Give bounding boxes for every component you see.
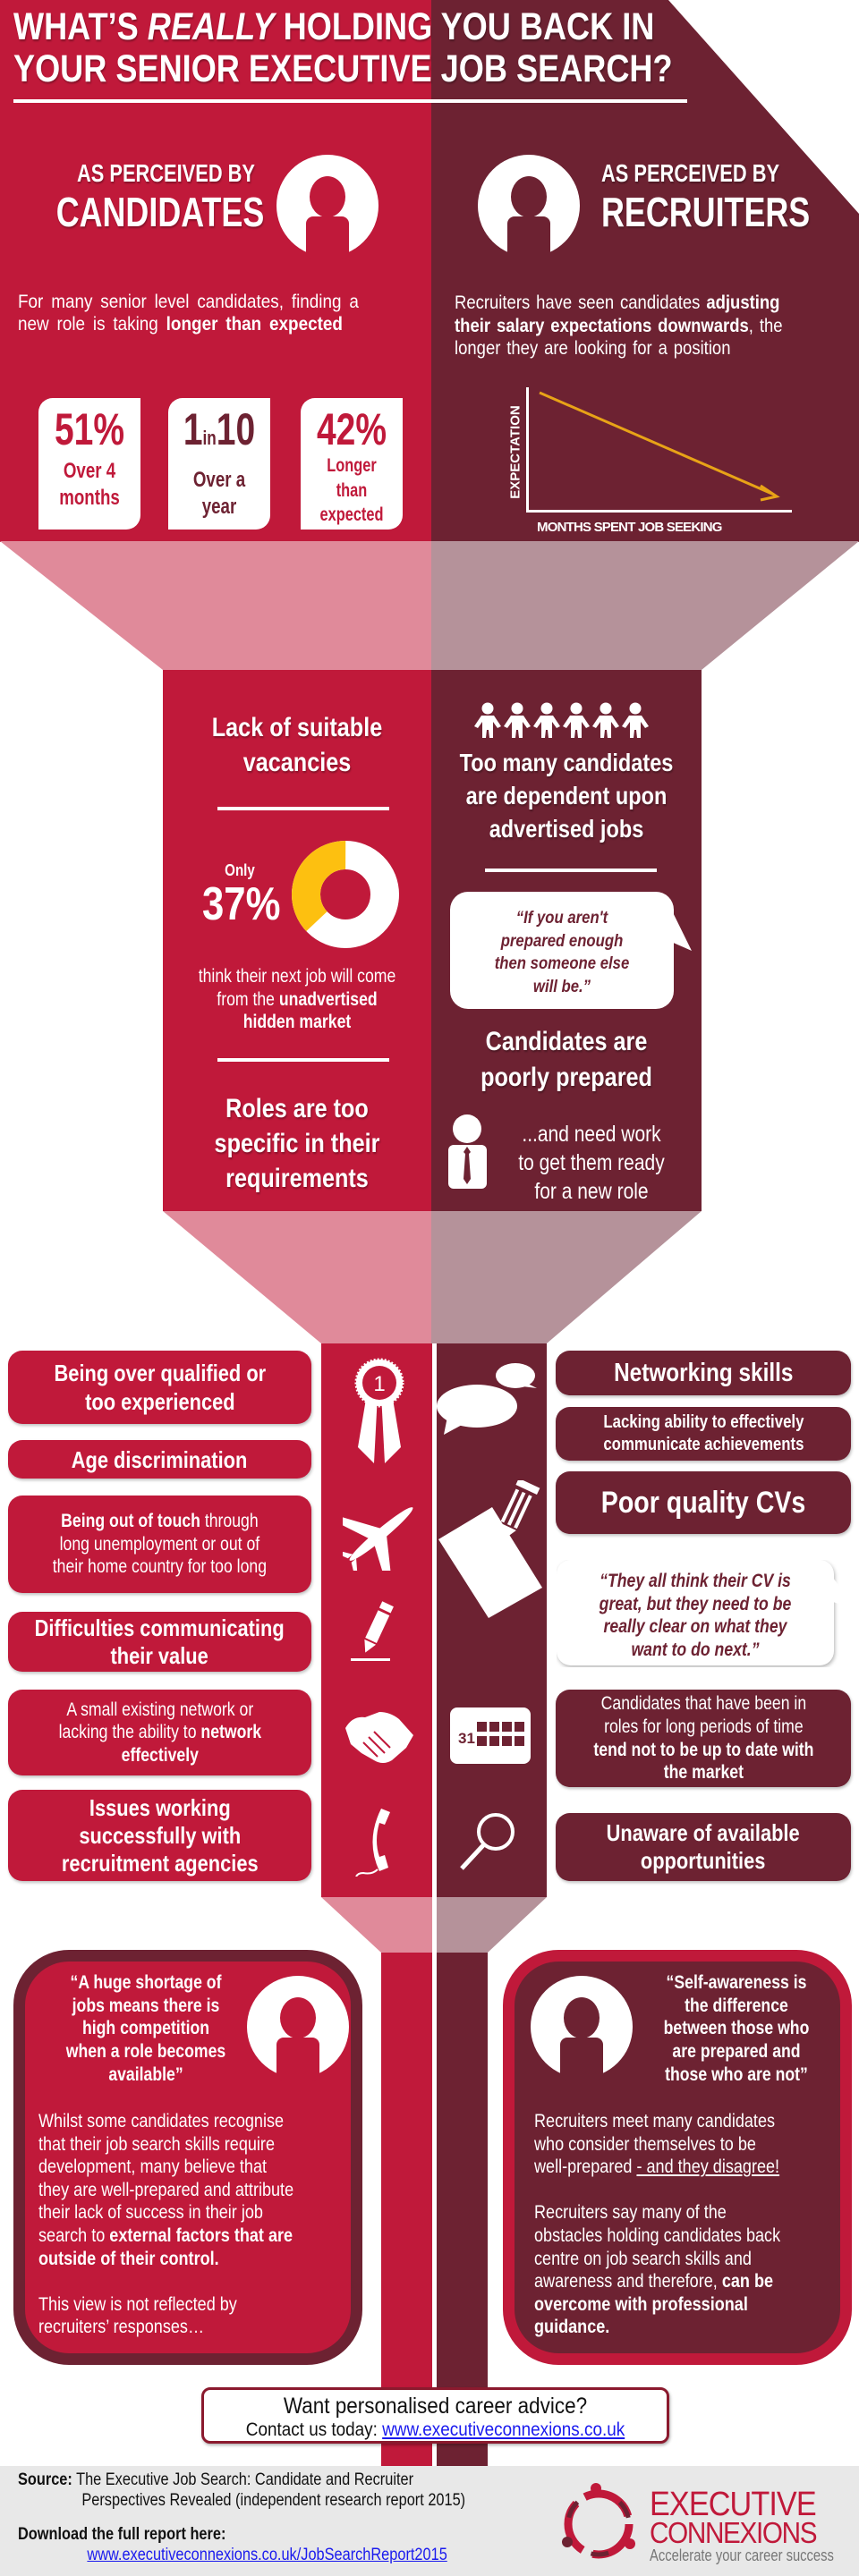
box: over qualified: too experienced: [85, 1388, 234, 1415]
icon: magnifier: [460, 1813, 515, 1870]
title: [13, 5, 673, 90]
heading: roles too specific: [215, 1094, 381, 1195]
text: candidates intro: [18, 292, 359, 335]
callout: career advice: [201, 2387, 669, 2444]
stat: 42%: 42%: [317, 404, 387, 454]
box: out of touch: their home country for too long: [53, 1556, 267, 1577]
callout: CV quote: [557, 1560, 838, 1667]
callout: CV quote: really clear on what they: [604, 1616, 787, 1637]
footer: download: Download the full report here:: [18, 2525, 225, 2544]
quote: [66, 1972, 225, 2085]
box: communicating value: Difficulties communicating: [35, 1614, 285, 1640]
text body: who consider themselves to be: [534, 2134, 756, 2155]
box: small network: A small existing network or: [66, 1699, 253, 1720]
box: unaware: opportunities: [641, 1847, 766, 1874]
footer: source: Perspectives Revealed (independent research report 2015): [81, 2491, 465, 2510]
icon: document with pencil: [438, 1480, 542, 1618]
heading: recruiters: RECRUITERS: [601, 189, 810, 235]
footer: download: www.executiveconnexions.co.uk/JobSearchReport2015: [87, 2546, 447, 2564]
icon: calendar: 31: [458, 1730, 475, 1747]
box: over qualified: [8, 1351, 311, 1424]
text body: development, many believe that: [38, 2157, 267, 2177]
callout: CV quote: want to do next.”: [631, 1640, 760, 1660]
text: recruiters intro: Recruiters have seen candidates adjusting: [455, 292, 779, 313]
icon: award ribbon: 1: [373, 1372, 386, 1396]
icon: person: [531, 1976, 633, 2073]
icon: calendar: [450, 1707, 531, 1764]
text body: outside of their control.: [38, 2249, 219, 2269]
box: lacking ability: Lacking ability to effectively: [603, 1412, 804, 1432]
logo: [562, 2483, 834, 2564]
box: long periods: roles for long periods of time: [604, 1716, 803, 1737]
icon: candidate person: [276, 155, 378, 252]
quote: available”: [108, 2064, 183, 2085]
chart: expectation vs months: [508, 387, 792, 535]
logo: CONNEXIONS: [650, 2516, 816, 2549]
stat: 42%: [301, 398, 403, 530]
box: poor CVs: Poor quality CVs: [601, 1485, 805, 1519]
text body: This view is not reflected by: [38, 2294, 237, 2315]
donut chart: [292, 841, 399, 948]
callout: quote bubble: prepared enough: [501, 932, 623, 950]
text body: [534, 2111, 780, 2337]
text body: Recruiters say many of the: [534, 2202, 727, 2223]
icon: person: [247, 1976, 349, 2073]
text body: Whilst some candidates recognise: [38, 2111, 284, 2131]
box: out of touch: Being out of touch through: [61, 1511, 259, 1531]
icon: airplane: [343, 1507, 413, 1571]
box: lacking ability: communicate achievements: [603, 1435, 804, 1454]
stat: 1 in 10: [168, 398, 270, 530]
callout: quote bubble: will be.”: [533, 977, 591, 996]
quote: high competition: [82, 2018, 209, 2038]
icon: award ribbon: [354, 1358, 404, 1463]
box: unaware: Unaware of available: [607, 1819, 800, 1846]
heading: candidates: AS PERCEIVED BY: [77, 159, 255, 187]
heading: poorly prepared: poorly prepared: [481, 1063, 652, 1092]
text body: obstacles holding candidates back: [534, 2225, 780, 2246]
text body: their lack of success in their job: [38, 2202, 263, 2223]
text: recruiters intro: longer they are looking for a position: [455, 338, 730, 359]
box: recruitment agencies: successfully with: [79, 1821, 241, 1848]
stat: 1 in 10: 1in10: [183, 404, 255, 454]
callout: quote bubble: [450, 892, 692, 1009]
text: candidates intro: new role is taking longer than expected: [18, 313, 343, 335]
text body: guidance.: [534, 2317, 609, 2337]
stat: 51%: [38, 398, 140, 530]
heading: roles too specific: Roles are too: [225, 1094, 369, 1123]
heading: too many candidates: are dependent upon: [466, 782, 667, 809]
icon: telephone: [355, 1809, 390, 1877]
heading: lack of suitable vacancies: Lack of suitable: [212, 713, 382, 742]
text: recruiters intro: their salary expectations downwards, the: [455, 315, 783, 336]
heading: too many candidates: [460, 749, 674, 844]
stat: only 37%: 37%: [202, 878, 280, 930]
chart: expectation vs months: MONTHS SPENT JOB SEEKING: [537, 520, 722, 535]
footer: source: [18, 2470, 465, 2510]
stat: only 37%: Only: [225, 861, 255, 879]
footer: download: [18, 2525, 447, 2564]
text body: overcome with professional: [534, 2294, 748, 2315]
stat: 51%: Over 4: [64, 459, 115, 483]
callout: quote bubble: then someone else: [495, 954, 629, 973]
heading: poorly prepared: [481, 1027, 652, 1093]
stat: 1 in 10: Over a: [193, 468, 245, 492]
box: poor CVs: [556, 1471, 851, 1534]
quote: jobs means there is: [72, 1996, 219, 2016]
callout: CV quote: great, but they need to be: [600, 1594, 791, 1614]
quote: “A huge shortage of: [71, 1972, 221, 1993]
box: long periods: Candidates that have been in: [600, 1693, 806, 1714]
text: recruiters intro: [455, 292, 783, 359]
text body: centre on job search skills and: [534, 2249, 752, 2269]
stat: 1 in 10: year: [202, 495, 236, 519]
quote: “Self-awareness is: [667, 1972, 806, 1993]
box: out of touch: [8, 1496, 311, 1593]
box: networking skills: Networking skills: [614, 1358, 793, 1386]
quote: [664, 1972, 809, 2085]
box: out of touch: long unemployment or out of: [60, 1534, 259, 1555]
callout: CV quote: “They all think their CV is: [600, 1571, 791, 1591]
text body: Recruiters meet many candidates: [534, 2111, 775, 2131]
box: recruitment agencies: Issues working: [89, 1794, 230, 1821]
heading: recruiters: [601, 159, 810, 235]
box: long periods: tend not to be up to date with: [593, 1739, 813, 1760]
text: need work: ...and need work: [522, 1122, 661, 1147]
heading: lack of suitable vacancies: vacancies: [243, 748, 351, 777]
callout: quote bubble: “If you aren't: [516, 909, 608, 928]
box: age discrimination: Age discrimination: [72, 1445, 248, 1472]
heading: lack of suitable vacancies: [212, 713, 383, 777]
stat: 51%: 51%: [55, 404, 124, 454]
icon: recruiter person: [478, 155, 580, 252]
text: candidates intro: For many senior level candidates, finding a: [18, 292, 359, 312]
stat: 42%: than: [336, 479, 367, 501]
icon: person with tie: [448, 1114, 487, 1189]
heading: roles too specific: requirements: [225, 1164, 369, 1193]
box: long periods: [556, 1690, 851, 1787]
stat: 42%: expected: [319, 504, 384, 525]
chart: expectation vs months: EXPECTATION: [508, 405, 523, 499]
heading: candidates: [56, 159, 265, 235]
box: small network: effectively: [121, 1745, 199, 1766]
text: hidden market: [199, 966, 395, 1032]
text: hidden market: think their next job will come: [199, 966, 395, 987]
panel: candidates summary: [13, 1950, 362, 2365]
text body: [38, 2111, 293, 2337]
logo: EXECUTIVE: [650, 2486, 816, 2523]
footer: source: Source: The Executive Job Search: Candidate and Recruiter: [18, 2470, 413, 2489]
heading: roles too specific: specific in their: [215, 1129, 379, 1158]
text body: well-prepared - and they disagree!: [534, 2157, 779, 2177]
box: small network: lacking the ability to network: [58, 1722, 261, 1742]
icon: speech bubbles: [437, 1363, 537, 1435]
heading: candidates: CANDIDATES: [56, 189, 264, 235]
box: networking skills: [556, 1351, 851, 1395]
box: lacking ability: [556, 1407, 851, 1461]
stat: 51%: months: [59, 486, 120, 510]
box: over qualified: Being over qualified or: [54, 1360, 266, 1386]
text: need work: for a new role: [534, 1179, 649, 1204]
box: small network: [8, 1690, 311, 1775]
box: recruitment agencies: [8, 1790, 311, 1881]
quote: those who are not”: [665, 2064, 808, 2085]
icon: handshake: [345, 1712, 413, 1763]
stat: 42%: Longer: [327, 455, 377, 476]
quote: when a role becomes: [66, 2041, 225, 2062]
box: long periods: the market: [663, 1762, 744, 1783]
text body: search to external factors that are: [38, 2225, 293, 2246]
box: communicating value: [8, 1612, 311, 1672]
text: hidden market: from the unadvertised: [217, 989, 378, 1009]
heading: poorly prepared: Candidates are: [486, 1027, 647, 1056]
icon: pencil: [351, 1601, 394, 1661]
text body: that their job search skills require: [38, 2134, 275, 2155]
quote: the difference: [685, 1996, 788, 2016]
callout: career advice: Want personalised career advice?: [284, 2394, 587, 2419]
box: age discrimination: [8, 1440, 311, 1479]
text: need work: to get them ready: [518, 1150, 665, 1175]
box: communicating value: their value: [111, 1642, 208, 1669]
box: unaware: [556, 1813, 851, 1881]
text: need work: [518, 1122, 665, 1204]
callout: career advice: Contact us today: www.executiveconnexions.co.uk: [246, 2419, 625, 2440]
text body: they are well-prepared and attribute: [38, 2180, 293, 2200]
box: recruitment agencies: recruitment agencies: [62, 1850, 258, 1877]
title: WHAT’S REALLY HOLDING YOU BACK IN: [13, 5, 654, 48]
text body: recruiters’ responses…: [38, 2317, 204, 2337]
title: YOUR SENIOR EXECUTIVE JOB SEARCH?: [13, 47, 673, 90]
heading: too many candidates: advertised jobs: [489, 815, 643, 843]
heading: too many candidates: Too many candidates: [460, 749, 673, 776]
text: hidden market: hidden market: [243, 1012, 351, 1032]
quote: between those who: [664, 2018, 809, 2038]
panel: recruiters summary: [503, 1950, 852, 2365]
icon: six people: [474, 703, 649, 738]
quote: are prepared and: [672, 2041, 801, 2062]
text body: awareness and therefore, can be: [534, 2271, 773, 2292]
logo: Accelerate your career success: [650, 2546, 834, 2564]
heading: recruiters: AS PERCEIVED BY: [601, 159, 779, 187]
